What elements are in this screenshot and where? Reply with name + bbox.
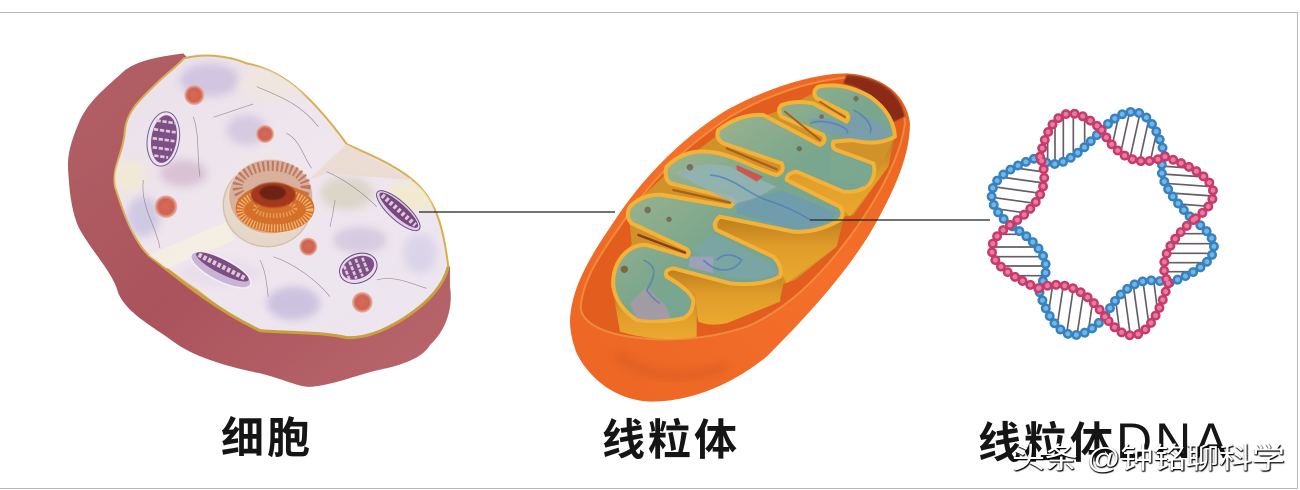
- organelle: mitochondrion upper left: [144, 110, 183, 168]
- inner cavity: [581, 77, 905, 340]
- blue strand: [992, 112, 1214, 335]
- matrix colour patches: [630, 113, 892, 320]
- outer texture: [617, 353, 727, 375]
- cytoplasm shading: [113, 63, 443, 320]
- granules: [621, 96, 859, 273]
- organelle: mitochondrion lower right: [335, 248, 382, 289]
- organelle: mitochondrion lower left: [186, 245, 256, 295]
- red detail: [737, 165, 763, 182]
- cristae folded surface: [613, 85, 895, 321]
- label: mitochondrial DNA: 线粒体DNA: [978, 413, 1231, 469]
- icon: mitochondrial DNA ring: [992, 112, 1214, 335]
- label: mitochondrion: 线粒体: [602, 417, 740, 465]
- cristae back walls: [615, 90, 894, 339]
- cell outer membrane: [68, 53, 451, 387]
- pink strand: [992, 113, 1213, 335]
- blue strand highlights: [992, 112, 1214, 335]
- cell cut face: [114, 56, 448, 338]
- fold gaps: [638, 102, 845, 253]
- golden rim highlight: [148, 255, 448, 338]
- watermark: 头条 @钟铭聊科学: [1012, 443, 1285, 475]
- ribosome balls: [155, 85, 373, 313]
- connector line: cell to mitochondrion: [419, 211, 615, 213]
- base pair rungs: [992, 112, 1214, 335]
- cristae front walls: [613, 138, 894, 339]
- fine filaments: [143, 87, 427, 297]
- icon: cell: [68, 53, 451, 387]
- cut planes: [308, 144, 413, 180]
- outer membrane: [570, 73, 910, 402]
- pink strand highlights: [992, 113, 1213, 335]
- nucleus: [223, 159, 314, 247]
- DNA strands inside matrix: [643, 110, 871, 303]
- connector line: mitochondrion to DNA: [810, 219, 990, 221]
- label: cell: 细胞: [221, 415, 313, 463]
- icon: mitochondrion: [570, 73, 910, 402]
- organelle: mitochondrion right: [371, 185, 425, 236]
